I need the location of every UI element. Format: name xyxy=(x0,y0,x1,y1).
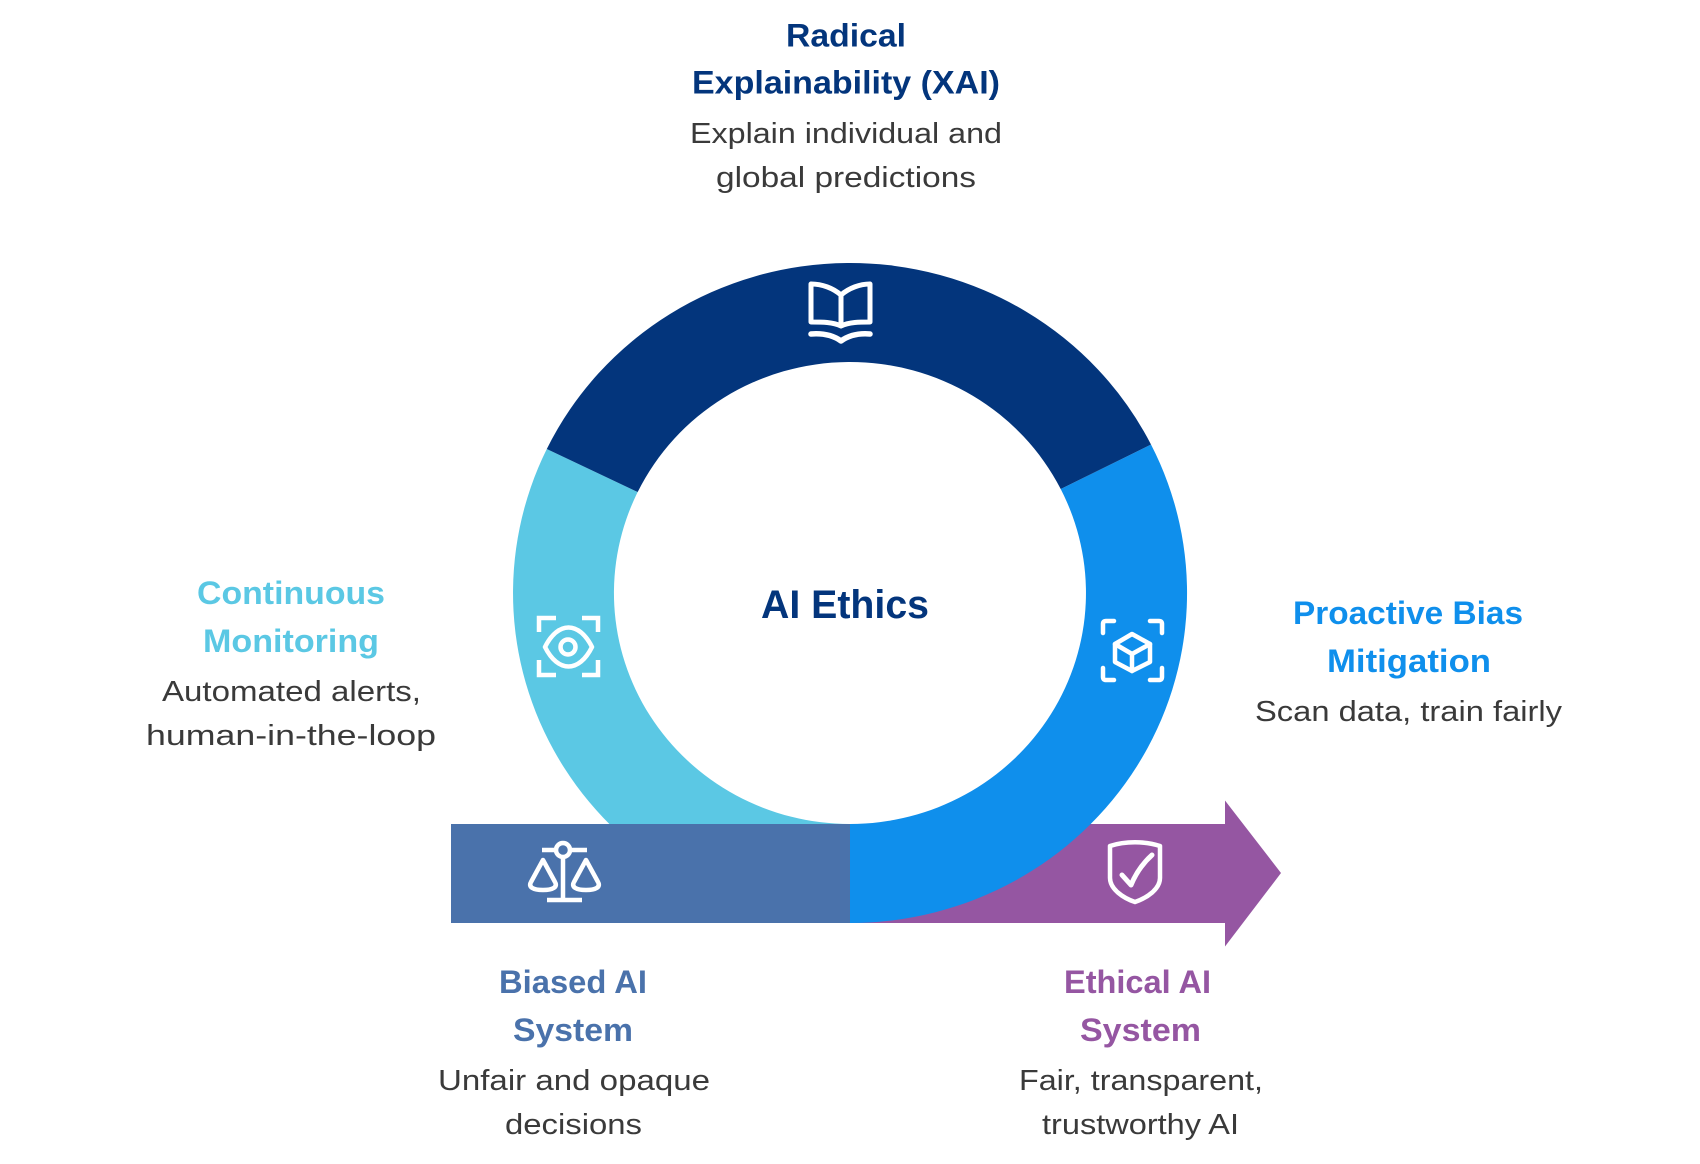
description xyxy=(438,1065,710,1141)
description xyxy=(690,118,1002,194)
purple arrow: ethical AI system xyxy=(850,800,1281,946)
text block: ethical AI system xyxy=(1019,964,1263,1141)
heading xyxy=(692,18,1000,100)
description: Fair, transparent, xyxy=(1019,1065,1263,1097)
description: Unfair and opaque xyxy=(438,1065,710,1097)
text block: continuous monitoring xyxy=(146,575,436,752)
heading: System xyxy=(513,1012,633,1048)
ring segment: radical explainability xyxy=(547,263,1151,492)
heading: Monitoring xyxy=(203,623,379,659)
text block: radical explainability xyxy=(690,18,1002,194)
description xyxy=(146,676,436,752)
icon: cube in focus frame xyxy=(1103,621,1162,680)
description: Automated alerts, xyxy=(162,676,421,708)
heading: Explainability (XAI) xyxy=(692,64,1000,100)
center label: AI Ethics: AI Ethics xyxy=(761,583,929,627)
icon: shield with check xyxy=(1110,842,1160,902)
steel blue bar: biased AI system xyxy=(451,824,850,923)
heading: System xyxy=(1080,1012,1201,1048)
text block: biased AI system xyxy=(438,964,710,1141)
description: global predictions xyxy=(716,162,976,194)
heading xyxy=(1293,595,1523,679)
description: trustworthy AI xyxy=(1042,1109,1239,1141)
heading: Mitigation xyxy=(1327,643,1491,679)
description xyxy=(1019,1065,1263,1141)
heading xyxy=(1064,964,1211,1048)
description: Explain individual and xyxy=(690,118,1002,150)
description: decisions xyxy=(505,1109,642,1141)
ring segment: continuous monitoring xyxy=(513,449,850,923)
ring segment: proactive bias mitigation xyxy=(850,444,1187,923)
heading: Proactive Bias xyxy=(1293,595,1523,631)
description: human-in-the-loop xyxy=(146,720,436,752)
heading: Radical xyxy=(786,18,906,54)
heading xyxy=(499,964,647,1048)
description: Scan data, train fairly xyxy=(1255,696,1563,728)
heading: Continuous xyxy=(197,575,385,611)
heading: Biased AI xyxy=(499,964,647,1000)
icon: balance scales xyxy=(530,843,599,900)
text block: proactive bias mitigation xyxy=(1255,595,1563,728)
icon: open book xyxy=(811,284,870,341)
heading: Ethical AI xyxy=(1064,964,1211,1000)
heading xyxy=(197,575,385,659)
icon: eye in focus frame xyxy=(539,618,598,675)
